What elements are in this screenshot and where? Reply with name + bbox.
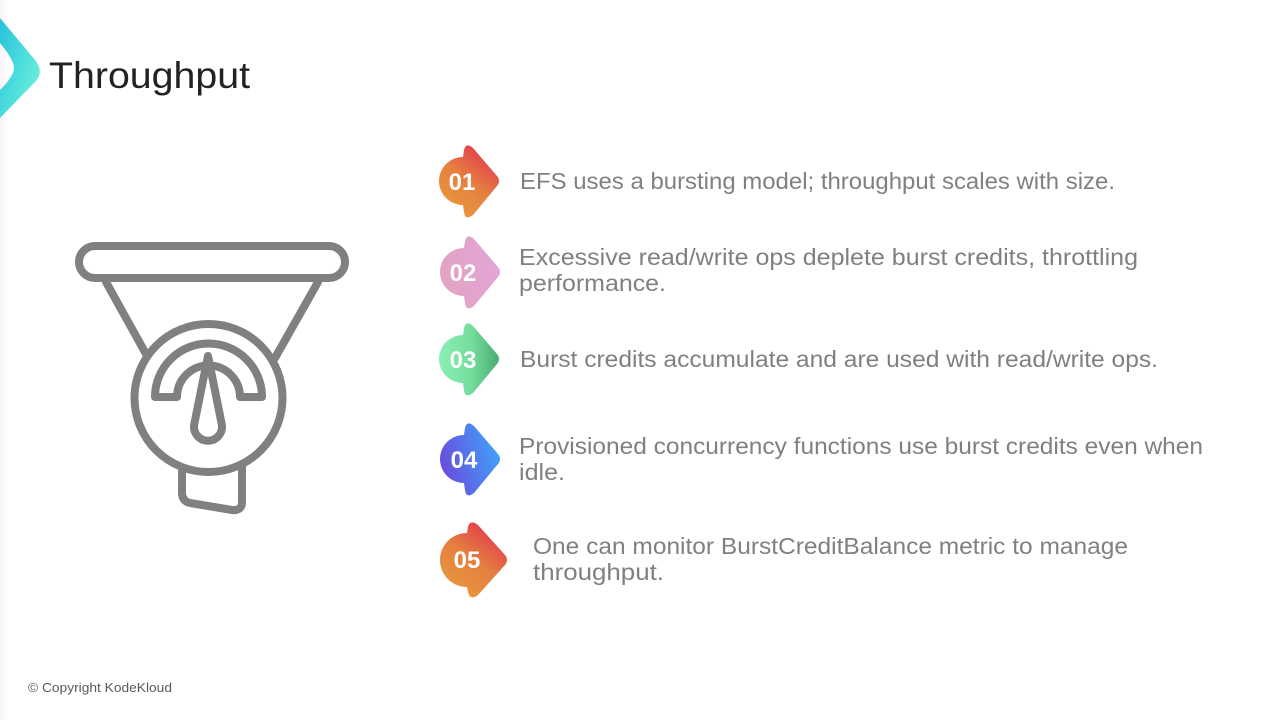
badge 05 xyxy=(440,522,507,597)
badge 02 xyxy=(440,236,500,308)
text 04: idle. xyxy=(519,459,565,485)
item 02 xyxy=(440,236,1144,308)
item 03 xyxy=(439,323,1158,395)
badge 04 xyxy=(440,423,500,495)
badge 02: 02 xyxy=(450,260,476,287)
icon: logo chevron xyxy=(0,18,40,118)
badge 04: 04 xyxy=(451,447,478,474)
badge 01: 01 xyxy=(449,169,475,196)
badge 03 xyxy=(439,323,499,395)
text 01: EFS uses a bursting model; throughput scales with size. xyxy=(520,168,1115,194)
text 03: Burst credits accumulate and are used with read/write ops. xyxy=(520,346,1158,372)
item 05 xyxy=(440,522,1134,597)
text 05: throughput. xyxy=(533,559,664,585)
badge 05: 05 xyxy=(454,547,480,574)
badge 01 xyxy=(439,145,499,217)
item 04 xyxy=(440,423,1209,495)
copyright: © Copyright KodeKloud xyxy=(28,680,172,695)
text 04: Provisioned concurrency functions use burst credits even when xyxy=(519,433,1203,459)
text 05: One can monitor BurstCreditBalance metric to manage xyxy=(533,533,1128,559)
text 02: performance. xyxy=(519,270,666,296)
badge 03: 03 xyxy=(450,347,476,374)
icon: funnel with gauge xyxy=(79,246,345,510)
title: Throughput xyxy=(49,55,251,96)
text 02: Excessive read/write ops deplete burst credits, throttling xyxy=(519,244,1138,270)
item 01 xyxy=(439,145,1115,217)
